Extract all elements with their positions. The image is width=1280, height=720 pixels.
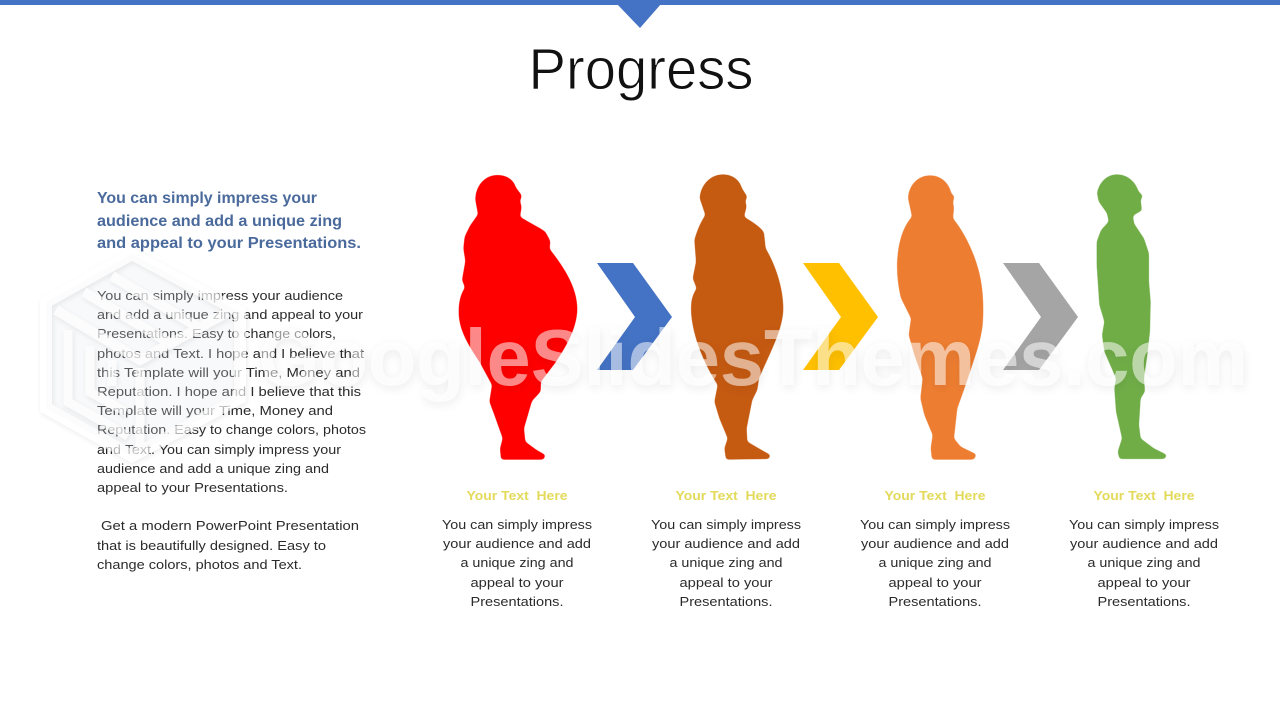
figure: green slim silhouette [1097, 174, 1167, 459]
left panel body paragraph: Reputation. I hope and I believe that this [97, 384, 362, 399]
caption column 1: You can simply impress [442, 517, 593, 532]
left panel body paragraph: Presentations. Easy to change colors, [97, 326, 336, 341]
caption column 2: your audience and add [652, 536, 800, 551]
caption column 1: Presentations. [470, 594, 564, 609]
left panel closing paragraph: that is beautifully designed. Easy to [97, 538, 326, 553]
figure: orange silhouette [897, 175, 983, 460]
left panel body paragraph: appeal to your Presentations. [97, 480, 288, 495]
left panel heading [97, 190, 361, 252]
caption column 2: Presentations. [680, 594, 772, 609]
left panel body paragraph: and add a unique zing and appeal to your [97, 307, 364, 322]
left panel body paragraph: this Template will your Time, Money and [97, 365, 360, 380]
caption column 4: a unique zing and [1088, 555, 1200, 570]
figure: brown silhouette [691, 174, 783, 460]
caption column 4: Presentations. [1098, 594, 1190, 609]
arrow: gray chevron [1003, 263, 1078, 370]
left panel heading: and appeal to your Presentations. [97, 235, 361, 252]
left panel closing paragraph [97, 518, 359, 572]
caption column 2: a unique zing and [670, 555, 782, 570]
left panel body paragraph: Template will your Time, Money and [97, 403, 333, 418]
caption column 4: appeal to your [1098, 575, 1191, 590]
watermark: site name: GoogleSlidesThemes.com [258, 313, 1248, 402]
title: Progress [528, 37, 754, 102]
caption column 4: your audience and add [1070, 536, 1218, 551]
caption column 3: Presentations. [888, 594, 982, 609]
left panel heading: You can simply impress your [97, 190, 317, 207]
caption column 3: You can simply impress [860, 517, 1011, 532]
caption column 4: Your Text Here [1094, 488, 1194, 503]
watermark: hexagon logo [46, 254, 240, 456]
caption column 2 [651, 488, 802, 609]
left text panel [97, 190, 367, 572]
caption column 3 [860, 488, 1011, 609]
left panel body paragraph: Reputation. Easy to change colors, photos [97, 422, 367, 437]
caption column 2: Your Text Here [676, 488, 776, 503]
left panel closing paragraph: Get a modern PowerPoint Presentation [101, 518, 359, 533]
caption column 2: You can simply impress [651, 517, 802, 532]
caption column 4 [1069, 488, 1220, 609]
left panel body paragraph: You can simply impress your audience [97, 288, 343, 303]
left panel body paragraph [97, 288, 367, 495]
caption column 3: your audience and add [861, 536, 1009, 551]
caption column 1: your audience and add [443, 536, 591, 551]
top accent bar [0, 0, 1280, 28]
caption column 2: appeal to your [680, 575, 773, 590]
left panel body paragraph: photos and Text. I hope and I believe that [97, 346, 364, 361]
caption column 1: appeal to your [470, 575, 564, 590]
figure: red largest silhouette [459, 175, 577, 460]
left panel closing paragraph: change colors, photos and Text. [97, 557, 302, 572]
caption column 1: a unique zing and [460, 555, 574, 570]
caption column 3: Your Text Here [884, 488, 986, 503]
left panel body paragraph: and Text. You can simply impress your [97, 442, 342, 457]
arrow: yellow chevron [803, 263, 878, 370]
caption column 1 [442, 488, 593, 609]
left panel heading: audience and add a unique zing [97, 213, 342, 230]
caption column 3: appeal to your [888, 575, 982, 590]
caption column 1: Your Text Here [466, 488, 568, 503]
caption column 4: You can simply impress [1069, 517, 1220, 532]
left panel body paragraph: audience and add a unique zing and [97, 461, 329, 476]
caption column 3: a unique zing and [878, 555, 992, 570]
arrow: blue chevron [597, 263, 672, 370]
